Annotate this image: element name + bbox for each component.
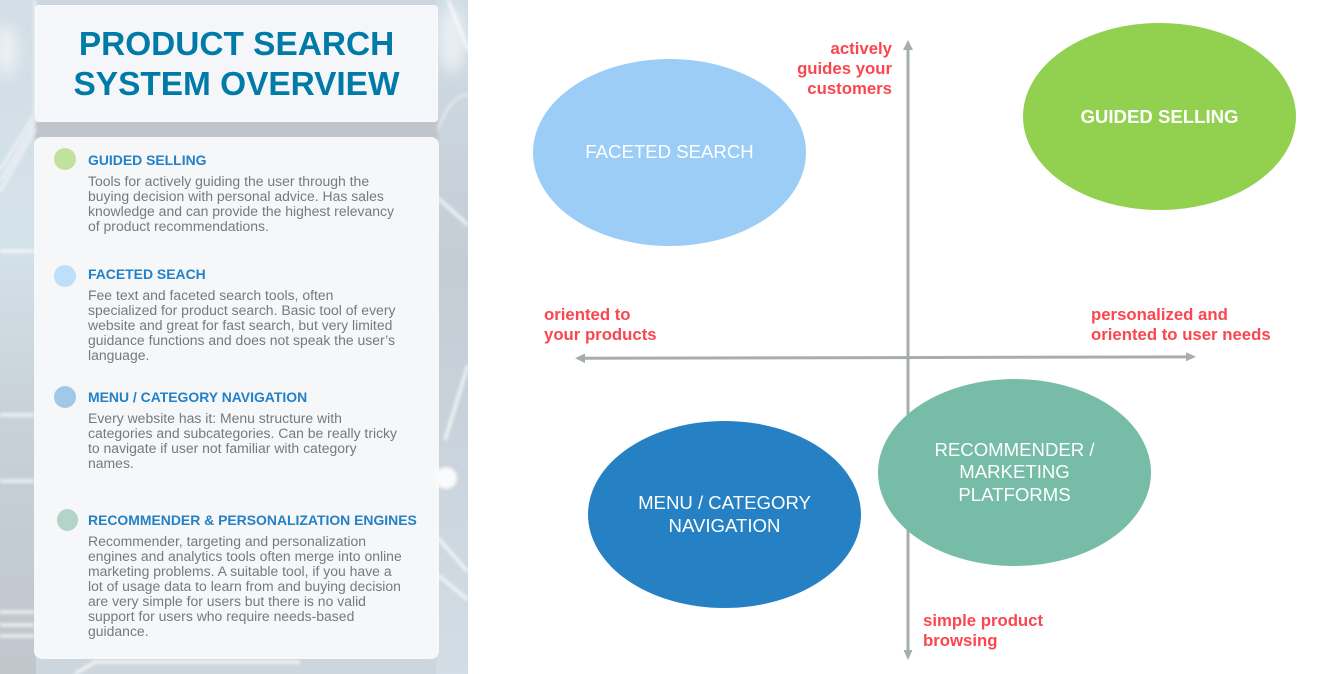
title: SYSTEM OVERVIEW (74, 66, 399, 103)
text block: website and great for fast search, but very limited (88, 317, 392, 333)
axis label: bottom: browsing (923, 631, 997, 650)
title (74, 26, 400, 103)
chart axes (575, 40, 1196, 660)
text block: lot of usage data to learn from and buying decision (88, 578, 401, 594)
axis label: bottom: simple product (923, 611, 1043, 630)
axis label: left: your products (544, 325, 657, 344)
ellipse: menu / category navigation (588, 421, 861, 608)
text block: language. (88, 347, 149, 363)
ellipse: faceted search: FACETED SEARCH (585, 141, 754, 162)
legend: menu / category navigation (54, 386, 397, 471)
text block: specialized for product search. Basic tool of every (88, 302, 395, 318)
legend: recommender engines (57, 509, 417, 639)
axis label: right (1091, 305, 1271, 344)
axis label: left (544, 305, 657, 344)
axis label: top: actively (831, 39, 892, 58)
text block: guidance functions and does not speak the user’s (88, 332, 395, 348)
legend: guided selling (54, 148, 394, 234)
axis label: bottom (923, 611, 1043, 650)
text block (88, 410, 397, 471)
text block: to navigate if user not familiar with category (88, 440, 357, 456)
ellipse: recommender / marketing platforms: RECOMMENDER / (934, 439, 1095, 460)
panel: descriptions (34, 137, 439, 659)
axis label: top: customers (807, 79, 892, 98)
title: PRODUCT SEARCH (79, 26, 394, 63)
title panel (35, 5, 438, 122)
text block: support for users who require needs-based (88, 608, 354, 624)
heading: MENU / CATEGORY NAVIGATION (88, 389, 307, 405)
text block: names. (88, 455, 134, 471)
ellipse: menu / category navigation: MENU / CATEGORY (638, 492, 811, 513)
ellipse: menu / category navigation: NAVIGATION (669, 514, 780, 536)
text block: Every website has it: Menu structure with (88, 410, 342, 426)
text block (88, 533, 402, 639)
ellipse: recommender / marketing platforms: MARKETING (959, 461, 1070, 482)
text block: knowledge and can provide the highest relevancy (88, 203, 394, 219)
ellipse: recommender / marketing platforms: PLATFORMS (958, 484, 1071, 505)
ellipse: guided selling (1023, 23, 1296, 210)
ellipse: faceted search (533, 59, 806, 246)
text block (88, 173, 394, 234)
axis label: right: oriented to user needs (1091, 325, 1271, 344)
text block: Recommender, targeting and personalization (88, 533, 366, 549)
axis label: top (797, 39, 892, 98)
heading: FACETED SEACH (88, 266, 206, 282)
icon: blue dot (54, 386, 76, 408)
text block: engines and analytics tools often merge into online (88, 548, 402, 564)
text block: are very simple for users but there is no valid (88, 593, 366, 609)
icon: green dot (54, 148, 76, 170)
text block: Fee text and faceted search tools, often (88, 287, 333, 303)
ellipse: guided selling: GUIDED SELLING (1080, 106, 1239, 127)
text block: marketing problems. A suitable tool, if you have a (88, 563, 392, 579)
text block: buying decision with personal advice. Has sales (88, 188, 384, 204)
heading: GUIDED SELLING (88, 152, 206, 168)
heading: RECOMMENDER & PERSONALIZATION ENGINES (88, 512, 417, 528)
background: circuit board panel (0, 0, 468, 674)
text block (88, 287, 396, 363)
ellipse: recommender / marketing platforms (878, 379, 1151, 566)
text block: guidance. (88, 623, 149, 639)
axis label: right: personalized and (1091, 305, 1228, 324)
text block: categories and subcategories. Can be really tricky (88, 425, 397, 441)
legend: faceted search (54, 265, 396, 363)
text block: Tools for actively guiding the user through the (88, 173, 369, 189)
icon: light blue dot (54, 265, 76, 287)
icon: teal dot (57, 509, 78, 531)
axis label: top: guides your (797, 59, 892, 78)
text block: of product recommendations. (88, 218, 269, 234)
axis label: left: oriented to (544, 305, 631, 324)
